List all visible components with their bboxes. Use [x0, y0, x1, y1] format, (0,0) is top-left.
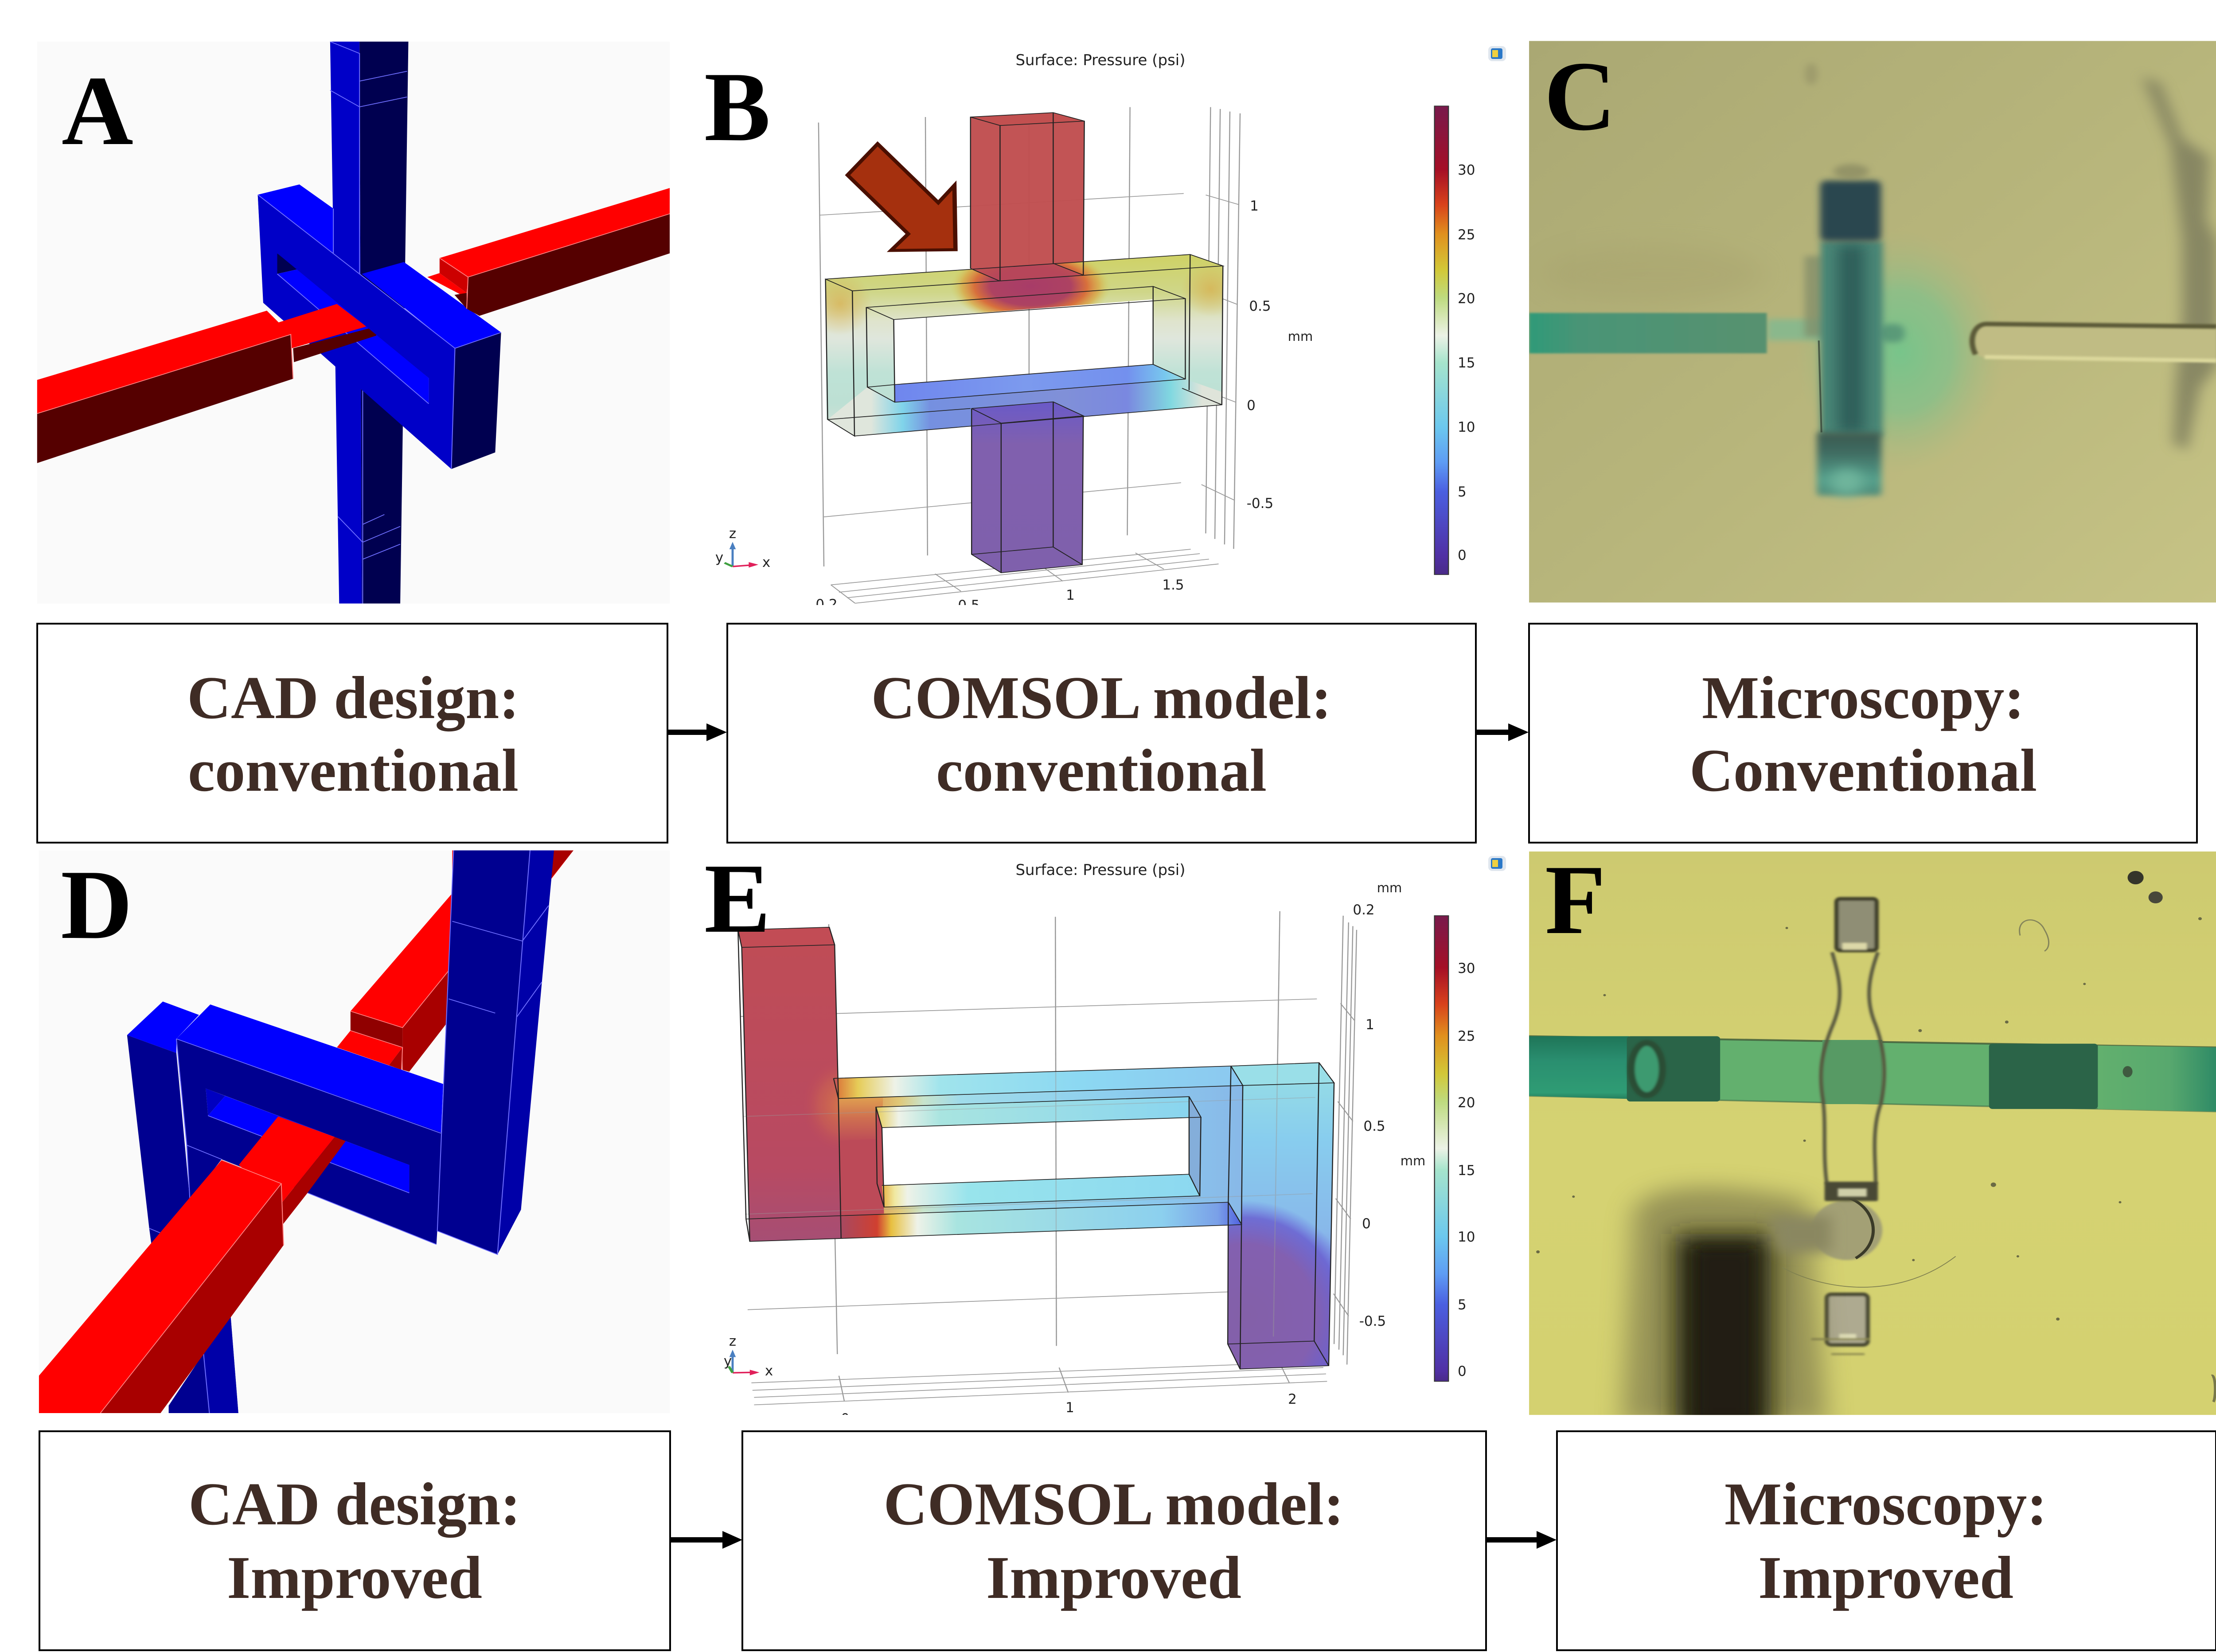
axis tick labels: 1	[1250, 198, 1259, 214]
axis tick labels: x	[765, 1363, 773, 1379]
caption: COMSOL conventional: COMSOL model:	[871, 664, 1331, 731]
colour scale labels: 20	[1458, 291, 1475, 307]
panel C: conventional microscopy	[1529, 41, 2216, 602]
colour scale labels: 25	[1458, 1028, 1475, 1044]
axis tick labels: z	[729, 1333, 736, 1349]
axis triad	[729, 1350, 760, 1375]
axis tick labels: 0	[1362, 1216, 1371, 1232]
panel E: improved COMSOL model	[704, 844, 1506, 1432]
caption: CAD conventional: conventional	[188, 737, 519, 804]
arrow: CAD to COMSOL improved	[670, 1531, 742, 1549]
panel letter A: A	[62, 56, 133, 166]
axis tick labels: -0.5	[1359, 1313, 1386, 1329]
arrow: CAD to COMSOL	[667, 723, 727, 741]
axis tick labels: 0.5	[1249, 298, 1271, 314]
colour scale labels: 10	[1458, 419, 1475, 435]
icon: COMSOL logo	[1488, 856, 1506, 871]
axis tick labels: 0.5	[1363, 1118, 1385, 1134]
caption: COMSOL improved: Improved	[986, 1544, 1241, 1611]
panel D: improved CAD design	[39, 850, 574, 1413]
colour scale labels: 0	[1458, 1363, 1467, 1379]
plot title: Surface: Pressure (psi)	[1015, 51, 1186, 69]
caption: COMSOL conventional	[727, 624, 1476, 843]
axis triad	[725, 542, 758, 568]
colour scale labels	[1458, 162, 1475, 563]
axis tick labels: y	[715, 550, 723, 566]
colour scale labels: 20	[1458, 1095, 1475, 1111]
axis tick labels: 1	[1066, 587, 1075, 603]
plot title: Surface: Pressure (psi)	[1015, 861, 1186, 879]
axis tick labels: mm	[1401, 1153, 1425, 1168]
panel letter C: C	[1544, 41, 1616, 151]
colour scale labels: 30	[1458, 162, 1475, 178]
colour scale labels: 30	[1458, 961, 1475, 976]
axis tick labels: 0.2	[815, 597, 838, 613]
caption: COMSOL conventional: conventional	[936, 737, 1267, 804]
caption: microscopy improved: Microscopy:	[1724, 1470, 2047, 1538]
axis tick labels: 0	[1247, 398, 1256, 414]
caption: microscopy conventional	[1529, 624, 2197, 843]
panel letter B: B	[704, 52, 770, 162]
axis tick labels: 1.5	[1162, 577, 1184, 593]
colour scale labels: 0	[1458, 547, 1467, 563]
caption: CAD improved: Improved	[227, 1544, 482, 1611]
axis tick labels: 0.5	[958, 598, 980, 613]
caption: microscopy conventional: Conventional	[1689, 737, 2037, 804]
axis tick labels: 2	[1288, 1391, 1297, 1407]
caption: CAD conventional: CAD design:	[187, 664, 519, 731]
colour scale labels: 5	[1458, 484, 1467, 500]
axis tick labels	[715, 198, 1313, 613]
colour scale labels: 25	[1458, 227, 1475, 243]
axis tick labels: 1	[1365, 1017, 1374, 1033]
icon: COMSOL logo	[1488, 46, 1506, 61]
panel F: improved microscopy	[1529, 845, 2216, 1443]
panel letter F: F	[1545, 845, 1606, 955]
caption: COMSOL improved: COMSOL model:	[884, 1470, 1344, 1538]
axis tick labels: 0.2	[1353, 902, 1375, 918]
caption: CAD improved	[39, 1431, 670, 1650]
axis tick labels: x	[762, 555, 770, 570]
caption: COMSOL improved	[742, 1431, 1486, 1650]
panel letter D: D	[61, 850, 133, 960]
colour scale labels: 10	[1458, 1229, 1475, 1245]
axis tick labels: 0	[841, 1411, 850, 1427]
axis tick labels: y	[724, 1353, 732, 1369]
panel B: conventional COMSOL model	[704, 46, 1506, 618]
axis tick labels: mm	[1288, 329, 1313, 344]
axis tick labels: 1	[1065, 1400, 1074, 1416]
colour scale labels: 15	[1458, 355, 1475, 371]
axis tick labels: z	[729, 526, 736, 542]
caption: microscopy improved: Improved	[1758, 1544, 2013, 1611]
arrow: COMSOL to microscopy	[1476, 723, 1529, 741]
axis tick labels: -0.5	[1247, 496, 1273, 512]
caption: microscopy conventional: Microscopy:	[1702, 664, 2025, 731]
panel A: conventional CAD design	[37, 42, 670, 604]
colour scale labels	[1458, 961, 1475, 1379]
caption: CAD improved: CAD design:	[188, 1470, 521, 1538]
colour scale labels: 15	[1458, 1163, 1475, 1179]
axis tick labels	[724, 880, 1425, 1427]
arrow: COMSOL to microscopy improved	[1486, 1531, 1557, 1549]
arrow: pressure hot spot	[847, 144, 956, 250]
panel letter E: E	[704, 844, 770, 953]
colour scale bar	[1435, 106, 1448, 574]
axis tick labels: mm	[1377, 880, 1402, 895]
colour scale bar	[1435, 916, 1448, 1381]
caption: microscopy improved	[1557, 1431, 2216, 1650]
caption: CAD conventional	[37, 624, 667, 843]
colour scale labels: 5	[1458, 1297, 1467, 1313]
